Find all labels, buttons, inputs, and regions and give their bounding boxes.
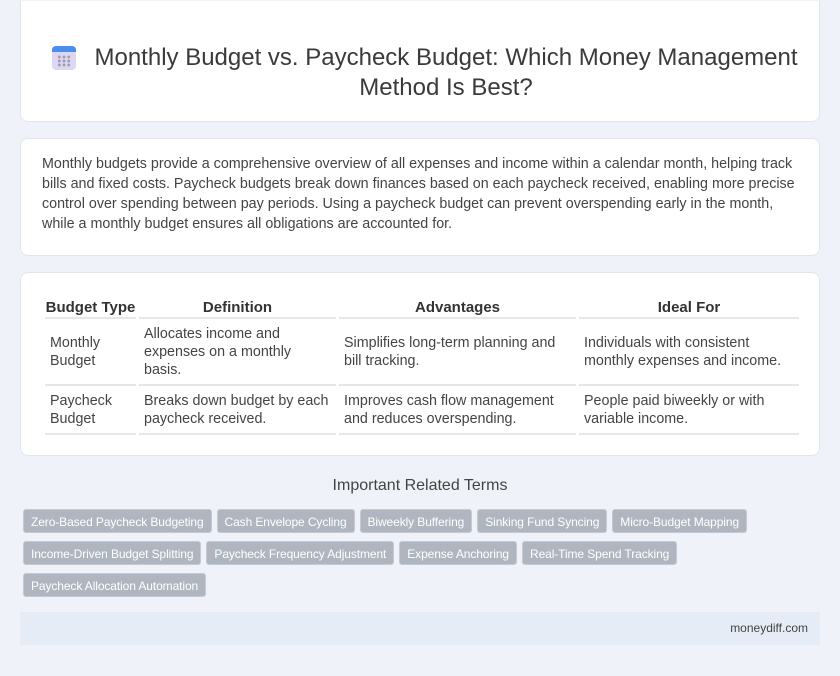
comparison table panel: Allocates income and expenses on a monthly basis. <box>144 326 291 378</box>
related terms heading: Important Related Terms <box>333 477 507 494</box>
comparison table panel: People paid biweekly or with variable income. <box>584 392 764 426</box>
comparison table panel: Paycheck Budget <box>50 392 112 426</box>
header panel <box>20 1 820 122</box>
comparison table panel: Breaks down budget by each <box>144 392 328 408</box>
comparison table panel: Definition <box>203 299 272 316</box>
related terms tags: Income-Driven Budget Splitting <box>31 547 193 561</box>
intro text panel: Monthly budgets provide a comprehensive overview of all expenses and income within a calendar month, helping track bills and fixed costs. Paycheck budgets break down finances based on each paycheck received, enabling more precise control over spending between pay periods. Using a paycheck budget can prevent overspending early in the month, while a monthly budget ensures all obligations are accounted for. <box>42 156 795 232</box>
related terms tags: Real-Time Spend Tracking <box>530 547 669 561</box>
comparison table panel: Budget Type <box>46 299 135 316</box>
related terms tags: Paycheck Frequency Adjustment <box>214 547 386 561</box>
comparison table panel: Simplifies long-term planning and bill tracking. <box>344 334 555 368</box>
intro text panel <box>20 138 820 256</box>
related terms tags: Paycheck Allocation Automation <box>31 579 198 593</box>
comparison table panel: Improves cash flow management and reduces overspending. <box>344 392 554 426</box>
related terms tags: Sinking Fund Syncing <box>485 515 599 529</box>
comparison table panel: Ideal For <box>658 299 720 316</box>
comparison table panel: Advantages <box>415 299 500 316</box>
related terms tags: Zero-Based Paycheck Budgeting <box>31 515 204 529</box>
footer <box>20 612 820 645</box>
title: Monthly Budget vs. Paycheck Budget: Which Money Management Method Is Best? <box>94 44 798 101</box>
related terms tags <box>23 509 747 597</box>
comparison table panel: paycheck received. <box>144 410 266 426</box>
comparison table panel: Individuals with consistent monthly expenses and income. <box>584 334 781 368</box>
icon: calendar <box>52 46 76 70</box>
related terms tags: Expense Anchoring <box>407 547 509 561</box>
related terms tags: Biweekly Buffering <box>368 515 464 529</box>
comparison table panel: Monthly Budget <box>50 334 100 368</box>
related terms tags: Micro-Budget Mapping <box>620 515 739 529</box>
comparison table panel <box>20 272 820 456</box>
footer: moneydiff.com <box>730 621 808 635</box>
related terms tags: Cash Envelope Cycling <box>225 515 347 529</box>
